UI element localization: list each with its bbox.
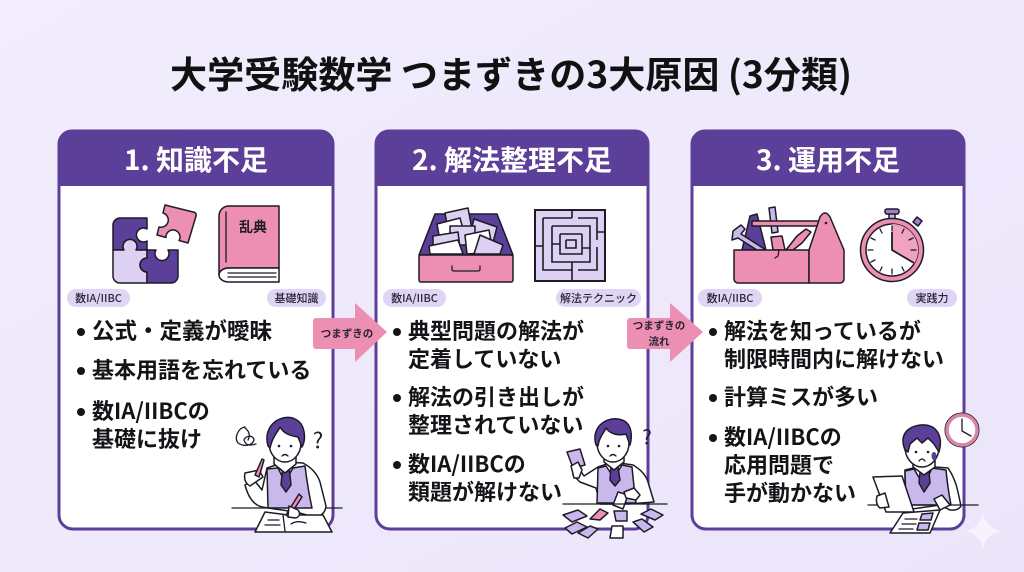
panel: method organisation [375,130,667,538]
bullet list: 数IA/IIBCの [724,420,842,452]
bullet list: 計算ミスが多い [724,380,878,412]
icon: stopwatch [860,209,924,282]
bullet list: 応用問題で [724,448,834,480]
panel 1 card [59,131,333,529]
icon: wall clock [945,413,979,447]
tag: basics: 基礎知識 [274,290,318,306]
bullet list: 基礎に抜け [92,422,202,454]
tag: subject: 数IA/IIBC [391,290,438,306]
illustration: confused student [232,417,342,532]
title: 大学受験数学 つまずきの3大原因 (3分類) [170,45,852,99]
tag: subject: 数IA/IIBC [75,290,122,306]
icon: maze [535,210,605,281]
illustration: student with cards [563,419,667,538]
bullet list: 類題が解けない [408,475,562,507]
panel: application [691,130,979,533]
tag: subject [383,289,446,307]
bullet list [77,314,311,454]
panel 1 header: 1. 知識不足 [124,139,268,179]
icon: toolbox [732,207,844,283]
bullet list: 数IA/IIBCの [408,447,526,479]
tag: subject [67,289,130,307]
arrow: cause flow 1 [313,303,387,362]
panel 3 header: 3. 運用不足 [756,139,900,179]
bullet list [709,314,944,508]
tag: basics [267,289,326,307]
panel 2 header: 2. 解法整理不足 [412,139,612,179]
panel 2 header [375,130,649,186]
illustration: student with cards: ? [642,421,652,450]
icon: sparkle [965,513,1001,549]
bullet list: 定着していない [408,342,561,374]
panel 3 card [692,131,964,529]
bullet list: 数IA/IIBCの [92,394,210,426]
tag: practical: 実践力 [916,290,948,306]
bullet list: 制限時間内に解けない [724,342,944,374]
icon: book [219,206,279,282]
bullet list: 解法の引き出しが [408,380,584,412]
panel 1 header [58,130,334,186]
tag: technique: 解法テクニック [560,290,637,306]
bullet list: 解法を知っているが [724,314,921,346]
arrow: cause flow 2: 流れ [648,334,670,349]
illustration: confused student: ? [313,423,323,455]
bullet list [393,314,584,507]
tag: practical [907,289,957,307]
tag: subject: 数IA/IIBC [707,290,753,306]
illustration: student running out of time [868,425,978,533]
panel 3 header [691,130,965,186]
arrow: cause flow 1: つまずきの [321,326,373,341]
icon: messy drawer [419,208,513,282]
panel 2 card [376,131,648,529]
arrow: cause flow 2 [627,303,703,362]
bullet list: 典型問題の解法が [408,314,584,346]
bullet list: 公式・定義が曖昧 [92,314,273,346]
tag: subject [698,289,762,307]
icon: puzzle [113,205,196,283]
panel: knowledge [58,130,342,532]
arrow: cause flow 2: つまずきの [633,318,685,333]
bullet list: 基本用語を忘れている [92,353,311,385]
bullet list: 手が動かない [724,476,856,508]
icon: book: 乱典 [239,217,267,237]
bullet list: 整理されていない [408,408,583,440]
